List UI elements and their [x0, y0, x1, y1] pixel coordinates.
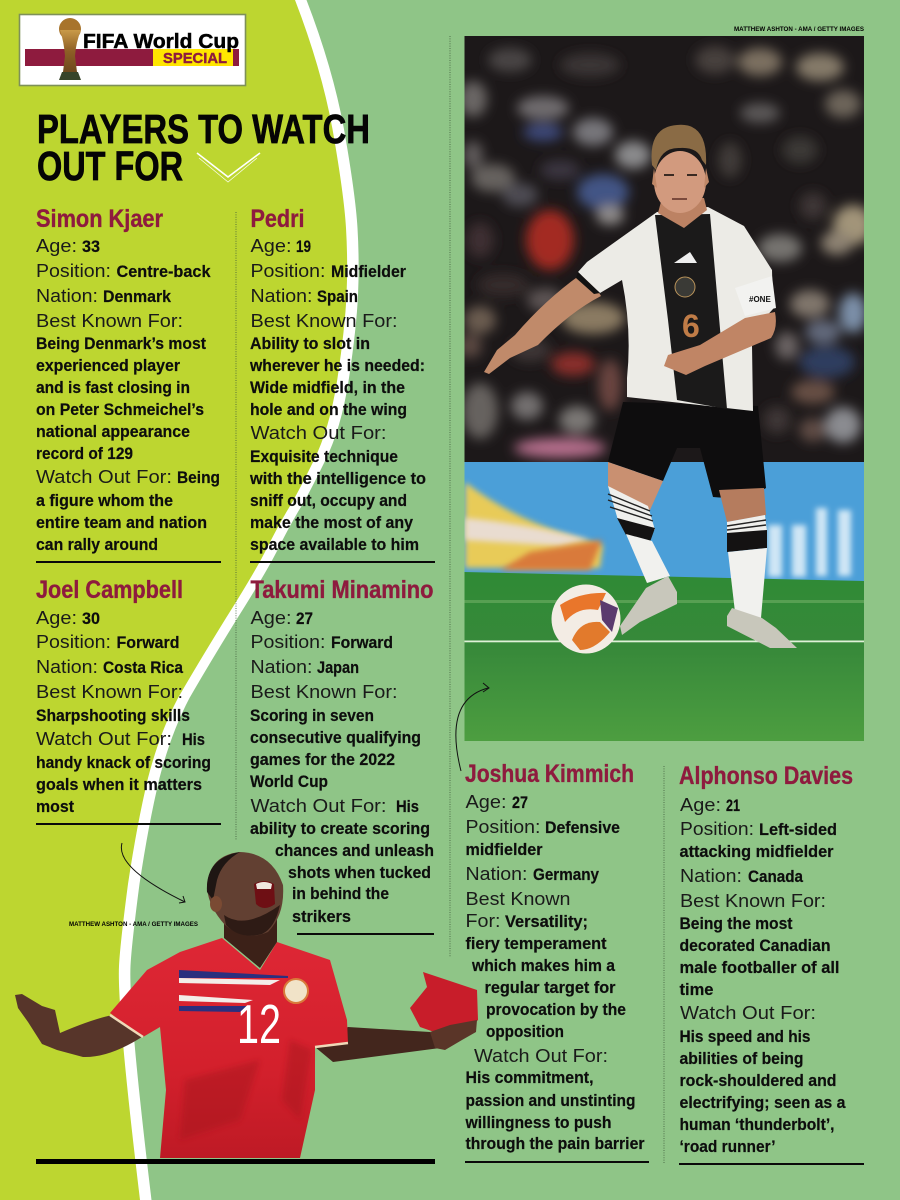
stats: Pedri: Position: [250, 261, 326, 281]
best known for: regular target for [484, 979, 616, 997]
panel: Pedri [249, 205, 435, 563]
best known for: games for the 2022 [250, 751, 395, 769]
neck [658, 198, 707, 228]
photo credit: Campbell: MATTHEW ASHTON - AMA / GETTY IMAGES [69, 921, 199, 928]
watch out for: sniff out, occupy and [250, 492, 407, 510]
name: Joshua Kimmich: Joshua Kimmich [465, 760, 634, 788]
ears [652, 168, 709, 188]
stats: Joel Campbell: Costa Rica [103, 659, 184, 677]
watch out for: rock-shouldered and [680, 1072, 836, 1090]
stats: Joshua Kimmich: Defensive [545, 819, 620, 837]
stats: Takumi Minamino: Nation: [250, 657, 312, 677]
shirt number: 12 [237, 993, 281, 1055]
logo: FIFA World Cup Special: SPECIAL [163, 51, 227, 67]
best known for [36, 682, 190, 725]
shirt [578, 207, 773, 411]
watch out for: Watch Out For: [36, 467, 172, 487]
best known for: Best Known For: [36, 682, 183, 702]
best known for [680, 891, 840, 999]
watch out for: entire team and nation [36, 514, 207, 532]
stats: Alphonso Davies: Nation: [680, 866, 742, 886]
best known for: Best Known For: [36, 311, 183, 331]
best known for: wherever he is needed: [249, 357, 425, 375]
best known for: World Cup [250, 773, 328, 791]
photo credit: Kimmich: MATTHEW ASHTON - AMA / GETTY IMAGES [734, 26, 865, 33]
face [654, 151, 706, 213]
stats: Joshua Kimmich: Age: [466, 792, 506, 812]
stats: Alphonso Davies: Left-sided [759, 821, 837, 839]
watch out for: Watch Out For: [250, 796, 386, 816]
title [37, 106, 370, 189]
watch out for: Watch Out For: [36, 729, 172, 749]
best known for: For: [466, 911, 500, 931]
watch out for: most [36, 798, 74, 816]
watch out for: Watch Out For: [680, 1003, 816, 1023]
watch out for: strikers [292, 908, 351, 926]
photo: player [484, 125, 797, 648]
photo background: advertising boards [464, 462, 864, 582]
stats: Joshua Kimmich: Germany [533, 866, 600, 884]
watch out for: abilities of being [680, 1050, 804, 1068]
watch out for: electrifying; seen as a [680, 1094, 846, 1112]
right hand [430, 1020, 477, 1050]
right arm [315, 1027, 440, 1062]
near arm [664, 312, 776, 375]
background: lime curved panel [0, 0, 347, 1200]
stats: Takumi Minamino [250, 608, 393, 677]
watch out for: ability to create scoring [250, 820, 430, 838]
photo: football [552, 584, 620, 654]
socks and boots [608, 486, 655, 530]
watch out for: chances and unleash [275, 842, 434, 860]
column dividers [236, 36, 664, 1163]
shirt stripes [179, 970, 288, 1012]
best known for: national appearance [36, 423, 190, 441]
best known for: fiery temperament [466, 935, 607, 953]
watch out for: make the most of any [250, 514, 414, 532]
stats: Simon Kjaer: Nation: [36, 286, 98, 306]
stats: Simon Kjaer: Position: [36, 261, 111, 281]
panel: Joshua Kimmich [465, 760, 649, 1163]
photo background: pitch [464, 572, 864, 741]
best known for: experienced player [36, 357, 181, 375]
stats: Joshua Kimmich: Nation: [466, 864, 528, 884]
stats: Pedri: 19 [296, 238, 311, 256]
watch out for [250, 796, 434, 926]
head [207, 852, 283, 936]
shorts [608, 402, 766, 498]
far arm [484, 275, 601, 374]
best known for: opposition [486, 1023, 564, 1041]
arrow: to Kimmich photo [456, 683, 489, 771]
best known for: Being the most [680, 915, 793, 933]
watch out for [680, 1003, 846, 1156]
hair [652, 125, 706, 170]
stats: Simon Kjaer: Age: [36, 236, 77, 256]
watch out for [465, 1046, 645, 1153]
best known for [249, 311, 425, 419]
watch out for: His commitment, [466, 1069, 594, 1087]
stats: Simon Kjaer [36, 236, 211, 306]
watch out for: in behind the [292, 885, 389, 903]
stats: Joel Campbell: Age: [36, 608, 77, 628]
background: white curved band [0, 0, 359, 1200]
arrow: to Campbell photo [121, 843, 185, 903]
stats: Joshua Kimmich [466, 792, 620, 884]
stats: Joel Campbell: Position: [36, 632, 111, 652]
stats: Alphonso Davies: 21 [726, 797, 740, 815]
watch out for: a figure whom the [36, 492, 173, 510]
red shirt in hand [410, 972, 478, 1040]
best known for: Best Known For: [680, 891, 826, 911]
watch out for [36, 729, 211, 816]
watch out for: handy knack of scoring [36, 754, 211, 772]
watch out for: space available to him [250, 536, 419, 554]
watch out for: willingness to push [465, 1114, 612, 1132]
best known for: record of 129 [36, 445, 133, 463]
stats: Alphonso Davies: Canada [748, 868, 804, 886]
ear [210, 896, 222, 912]
best known for: Best Known [466, 889, 570, 909]
panel: Joel Campbell [36, 576, 221, 825]
shirt shadows [180, 1040, 312, 1140]
best known for [466, 889, 626, 1041]
panel: Alphonso Davies [679, 762, 864, 1165]
name: Joel Campbell: Joel Campbell [36, 576, 183, 604]
stats: Joshua Kimmich: Position: [466, 817, 540, 837]
watch out for: shots when tucked [288, 864, 431, 882]
best known for: Sharpshooting skills [36, 707, 190, 725]
stats: Pedri: Midfielder [331, 263, 407, 281]
watch out for: Exquisite technique [250, 448, 398, 466]
stats: Takumi Minamino: Age: [250, 608, 292, 628]
logo: FIFA World Cup Special: FIFA World Cup [83, 31, 239, 53]
watch out for: through the pain barrier [466, 1135, 645, 1153]
watch out for: can rally around [36, 536, 158, 554]
watch out for: Watch Out For: [474, 1046, 608, 1066]
best known for: consecutive qualifying [250, 729, 421, 747]
stats: Takumi Minamino: Position: [250, 632, 326, 652]
watch out for: goals when it matters [36, 776, 202, 794]
stats: Joel Campbell [36, 608, 184, 677]
stats: Alphonso Davies: Age: [680, 795, 721, 815]
photo: Joel Campbell in Costa Rica kit [15, 852, 478, 1158]
stats: Takumi Minamino: Forward [331, 634, 393, 652]
sleeve trim [110, 1015, 348, 1047]
icon: chevron [197, 153, 260, 182]
photo: player: 6 [682, 308, 700, 344]
stats: Pedri: Age: [250, 236, 292, 256]
watch out for: with the intelligence to [249, 470, 426, 488]
panel: Takumi Minamino [250, 576, 434, 935]
photo: player: #ONE [749, 295, 771, 304]
shirt [110, 938, 348, 1158]
watch out for: His speed and his [680, 1028, 810, 1046]
title: PLAYERS TO WATCH [37, 106, 370, 152]
best known for: Best Known For: [250, 682, 398, 702]
logo: FIFA World Cup Special [20, 14, 246, 86]
best known for [250, 682, 421, 791]
open mouth [254, 881, 275, 908]
stats: Joel Campbell: 30 [82, 610, 100, 628]
best known for: male footballer of all [680, 959, 840, 977]
legs [608, 462, 663, 510]
watch out for [249, 423, 426, 554]
best known for: provocation by the [486, 1001, 626, 1019]
stats: Joel Campbell: Forward [116, 634, 180, 652]
stats: Alphonso Davies [680, 795, 837, 886]
icon: World Cup trophy [59, 18, 81, 80]
stats: Joshua Kimmich: midfielder [466, 841, 543, 859]
stats: Pedri [250, 236, 407, 306]
stats: Pedri: Spain [317, 288, 358, 306]
photo background: blurred crowd [458, 46, 873, 458]
title: OUT FOR [37, 143, 183, 189]
stats: Simon Kjaer: 33 [82, 238, 100, 256]
panel: Simon Kjaer [36, 205, 221, 563]
best known for: which makes him a [471, 957, 616, 975]
stats: Joshua Kimmich: 27 [512, 794, 528, 812]
beard shadow [224, 905, 280, 936]
neck [224, 915, 277, 968]
best known for: on Peter Schmeichel’s [36, 401, 204, 419]
watch out for: ‘road runner’ [680, 1138, 776, 1156]
left arm and hand [15, 994, 145, 1057]
best known for: decorated Canadian [680, 937, 830, 955]
name: Takumi Minamino: Takumi Minamino [250, 576, 434, 604]
bottom rule [36, 1159, 435, 1164]
watch out for: His [396, 798, 419, 816]
watch out for [36, 467, 220, 554]
best known for: Versatility; [505, 913, 588, 931]
watch out for: passion and unstinting [466, 1092, 636, 1110]
best known for: Being Denmark’s most [36, 335, 206, 353]
best known for: Scoring in seven [250, 707, 374, 725]
stats: Alphonso Davies: attacking midfielder [680, 843, 834, 861]
watch out for: human ‘thunderbolt’, [680, 1116, 834, 1134]
hair [207, 852, 240, 900]
best known for: Best Known For: [250, 311, 398, 331]
best known for: Wide midfield, in the [250, 379, 405, 397]
best known for: hole and on the wing [250, 401, 407, 419]
name: Pedri: Pedri [250, 205, 304, 233]
name: Alphonso Davies: Alphonso Davies [679, 762, 853, 790]
best known for [36, 311, 206, 463]
best known for: Ability to slot in [250, 335, 370, 353]
stats: Simon Kjaer: Centre-back [116, 263, 211, 281]
best known for: and is fast closing in [36, 379, 190, 397]
stats: Alphonso Davies: Position: [680, 819, 754, 839]
stats: Simon Kjaer: Denmark [103, 288, 172, 306]
stats: Takumi Minamino: Japan [317, 659, 359, 677]
photo: Joshua Kimmich in Germany kit [458, 36, 873, 741]
stats: Pedri: Nation: [250, 286, 312, 306]
stats: Takumi Minamino: 27 [296, 610, 313, 628]
name: Simon Kjaer: Simon Kjaer [36, 205, 163, 233]
watch out for: Watch Out For: [250, 423, 386, 443]
watch out for: Being [177, 469, 220, 487]
best known for: time [680, 981, 714, 999]
shirt crest [284, 979, 308, 1003]
stats: Joel Campbell: Nation: [36, 657, 98, 677]
watch out for: His [182, 731, 205, 749]
